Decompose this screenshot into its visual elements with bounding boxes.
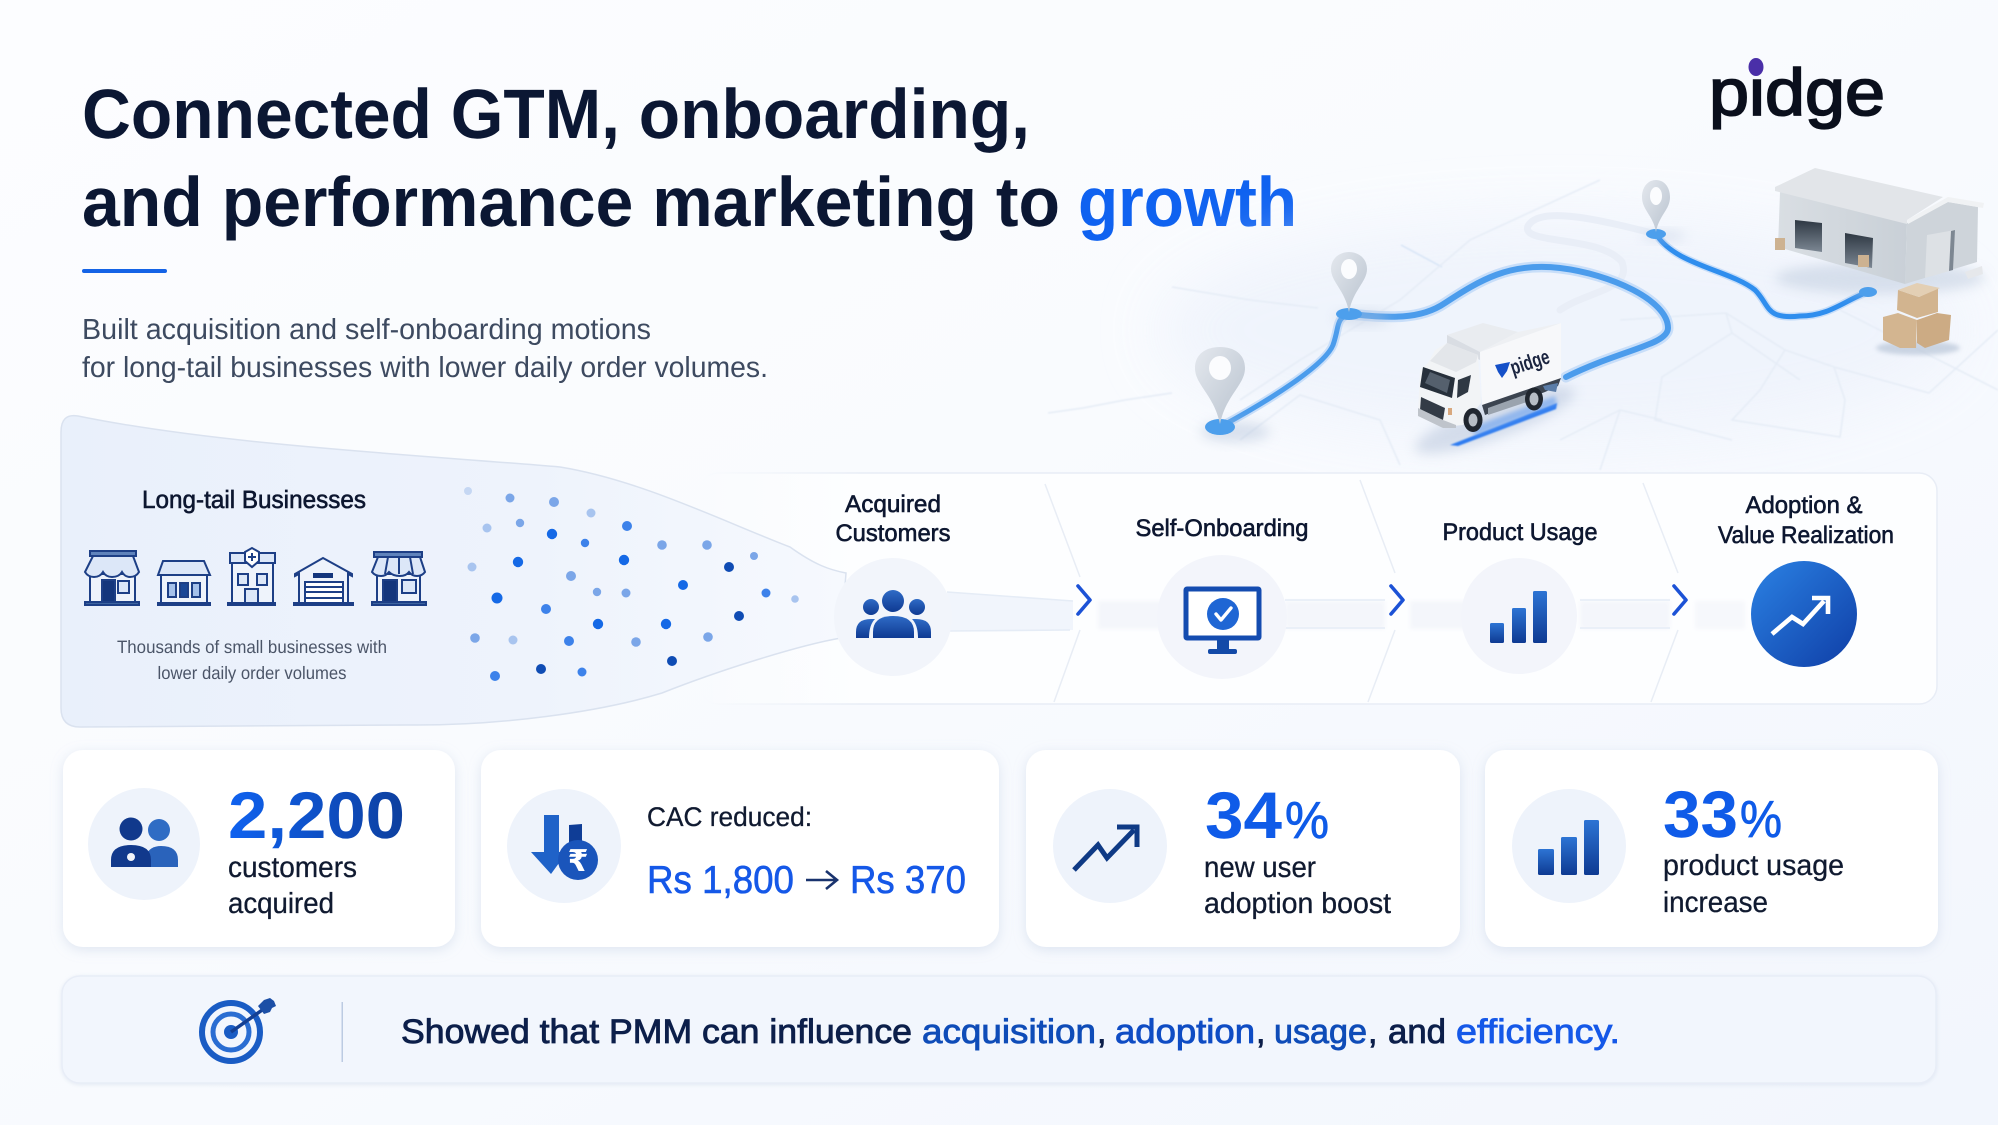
stat card: customers acquired [63,750,455,947]
pin one [1195,347,1270,442]
chassis [1482,378,1561,415]
icon: falling arrow with rupee coin [531,815,598,880]
arrow: to adoption [1674,586,1686,614]
takeaway statement [401,1013,1620,1051]
pin three [1642,180,1686,241]
stat card: product usage increase: product usage [1663,850,1844,882]
stat card: CAC reduced [481,750,999,947]
parcels [1876,283,1960,355]
panel: long-tail funnel [61,416,846,727]
stage: self-onboarding: Self-Onboarding [1136,515,1308,542]
route line: third leg [1656,234,1868,317]
stat card: new user adoption boost [1026,750,1460,947]
stat card: new user adoption boost: adoption boost [1204,888,1391,920]
title: and performance marketing to [82,163,1060,241]
subtitle text [82,314,768,384]
pin two [1331,252,1390,325]
stat card: product usage increase: increase [1663,887,1768,919]
truck [1409,323,1581,466]
route line: first leg [1220,314,1349,427]
route line: second leg [1349,267,1668,377]
takeaway statement: efficiency. [1456,1013,1620,1051]
stage: adoption and value realization: Adoption & [1746,492,1862,519]
scattered business dots [464,487,799,681]
takeaway statement: , [1256,1013,1265,1051]
icon: storefront one [85,551,139,605]
stat card: customers acquired: acquired [228,888,334,920]
funnel caption: lower daily order volumes [158,663,346,683]
arrow: to self-onboarding [1078,586,1090,614]
pidge logo: pidge [1709,55,1885,129]
title: Connected GTM, onboarding, [82,75,1030,153]
arrow: to product usage [1391,586,1403,614]
stage: self-onboarding [1136,515,1308,679]
flow bands [947,592,1745,631]
cargo box [1447,323,1518,352]
takeaway banner [62,976,1936,1083]
icon: monitor with check [1186,589,1259,654]
stage separators [1045,480,1678,702]
icon: warehouse [294,558,353,605]
takeaway statement: acquisition [922,1013,1096,1051]
stage: adoption and value realization [1718,492,1894,667]
funnel heading: Long-tail Businesses [142,486,366,514]
icon: usage bars [1538,820,1599,875]
icon: bars [1490,591,1547,643]
warehouse [1775,168,1985,294]
map road lines [1048,180,1998,470]
stat card: new user adoption boost: new user [1204,852,1316,884]
arrow: from old to new CAC [806,871,837,889]
stage: acquired customers: Customers [836,520,950,547]
takeaway statement: usage [1274,1013,1367,1051]
icon: trend arrow [1074,827,1137,870]
stage: adoption and value realization: Value Realization [1718,522,1894,549]
takeaway statement: , [1097,1013,1106,1051]
panel: journey stages [700,473,1937,704]
route end marker [1859,287,1877,297]
subtitle text: Built acquisition and self-onboarding motions [82,314,651,346]
stat card: customers acquired: 2,200 [228,778,405,852]
stat card: CAC reduced: Rs 370 [850,859,966,902]
icon: group of people [856,590,931,638]
takeaway statement: adoption [1115,1013,1255,1051]
stat card: CAC reduced: Rs 1,800 [647,859,794,902]
pale service road [1527,216,1656,310]
stat card: customers acquired: customers [228,852,357,884]
stat card: new user adoption boost: 34 [1205,778,1282,852]
stage: acquired customers: Acquired [845,491,941,518]
takeaway statement: and [1388,1013,1446,1051]
funnel caption: Thousands of small businesses with [117,637,387,657]
funnel caption [117,637,387,683]
stage: product usage [1442,519,1598,674]
truck logo text: pidge [1507,346,1553,380]
wheels [1464,408,1482,432]
icon: two people [111,818,178,867]
stat card: CAC reduced: CAC reduced: [647,802,812,832]
stat card: new user adoption boost: % [1285,792,1329,850]
takeaway statement: , [1368,1013,1377,1051]
icon: storefront three [372,552,426,605]
stat card: product usage increase [1485,750,1938,947]
icon: rising arrow [1772,598,1828,634]
subtitle text: for long-tail businesses with lower daily order volumes. [82,352,768,384]
icon: falling arrow with rupee coin: ₹ [568,845,588,878]
icon: clinic building [228,548,275,605]
truck logo mark [1495,362,1510,378]
icon: storefront two [158,561,210,605]
stage: product usage: Product Usage [1442,519,1598,546]
delivery route map [1048,168,1998,470]
title [82,75,1297,241]
takeaway statement: Showed that PMM can influence [401,1013,912,1051]
title: growth [1078,163,1297,241]
stat card: product usage increase: 33 [1663,777,1738,851]
stage: acquired customers [834,491,952,676]
icon: target with dart [202,998,276,1061]
stat card: product usage increase: % [1740,791,1782,849]
cab [1418,343,1481,427]
